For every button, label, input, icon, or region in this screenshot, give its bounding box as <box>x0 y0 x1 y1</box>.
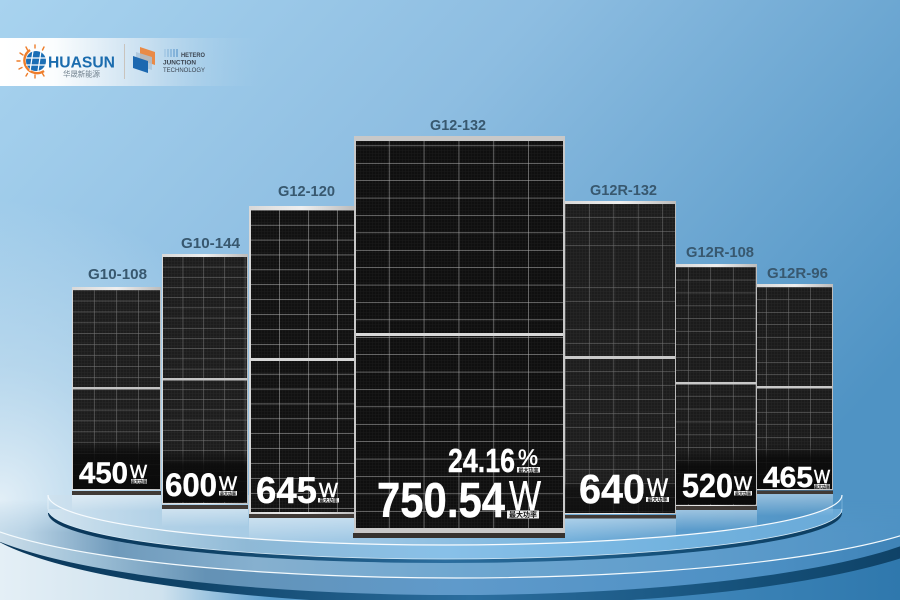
logo band <box>0 38 268 86</box>
logo Chinese name: 华晟新能源 <box>63 68 100 78</box>
logo divider <box>124 44 125 79</box>
power value: 最大功率 <box>131 478 147 484</box>
logo wordmark: HUASUN <box>48 54 115 72</box>
icon: HJT layered squares <box>133 47 155 73</box>
power value: W <box>734 474 752 495</box>
power value: 520 <box>682 467 733 504</box>
power value: W <box>219 474 237 495</box>
power value: W <box>814 467 830 487</box>
power value: 750.54 <box>377 474 505 528</box>
power value: 最大功率 <box>647 496 668 504</box>
power value: 最大功率 <box>509 510 537 519</box>
efficiency value: 最大功率 <box>518 467 539 474</box>
panel reflections on stage <box>72 494 833 542</box>
power value: W <box>319 480 338 502</box>
model label: G12R-132 <box>590 182 657 199</box>
power value: 最大功率 <box>814 483 830 489</box>
power value: 最大功率 <box>735 490 751 496</box>
power value: 450 <box>79 457 128 490</box>
efficiency value: 24.16 <box>448 442 515 479</box>
panel: G10-108 <box>72 266 161 495</box>
HJT text: TECHNOLOGY <box>163 68 205 74</box>
power value: 600 <box>165 467 217 503</box>
power value: 640 <box>579 466 645 512</box>
panel: G12-132 flagship <box>353 117 565 538</box>
power value: W <box>130 462 147 482</box>
panel: G12-120 <box>249 183 354 518</box>
panel: G10-144 <box>162 235 248 509</box>
panel: G12R-108 <box>676 244 757 510</box>
HJT text <box>163 53 205 74</box>
HJT text: JUNCTION <box>163 60 196 66</box>
power value: 最大功率 <box>320 497 338 504</box>
model label: G10-144 <box>181 235 241 252</box>
model label: G10-108 <box>88 266 147 283</box>
model label: G12-120 <box>278 183 335 200</box>
icon: Huasun sun globe <box>17 45 46 78</box>
panel: G12R-132 <box>565 182 676 518</box>
circular stage platform <box>0 495 900 600</box>
model label: G12R-96 <box>767 265 828 282</box>
icon: gradient stripes <box>164 49 178 57</box>
power value: W <box>647 474 668 502</box>
model label: G12R-108 <box>686 244 754 261</box>
panel: G12R-96 <box>757 265 833 494</box>
efficiency value: % <box>518 445 538 470</box>
power value: 最大功率 <box>220 490 236 496</box>
HJT text: HETERO <box>181 53 205 59</box>
power value: W <box>509 472 541 519</box>
power value: 465 <box>763 462 813 494</box>
power value: 645 <box>256 470 317 511</box>
model label: G12-132 <box>430 117 486 134</box>
